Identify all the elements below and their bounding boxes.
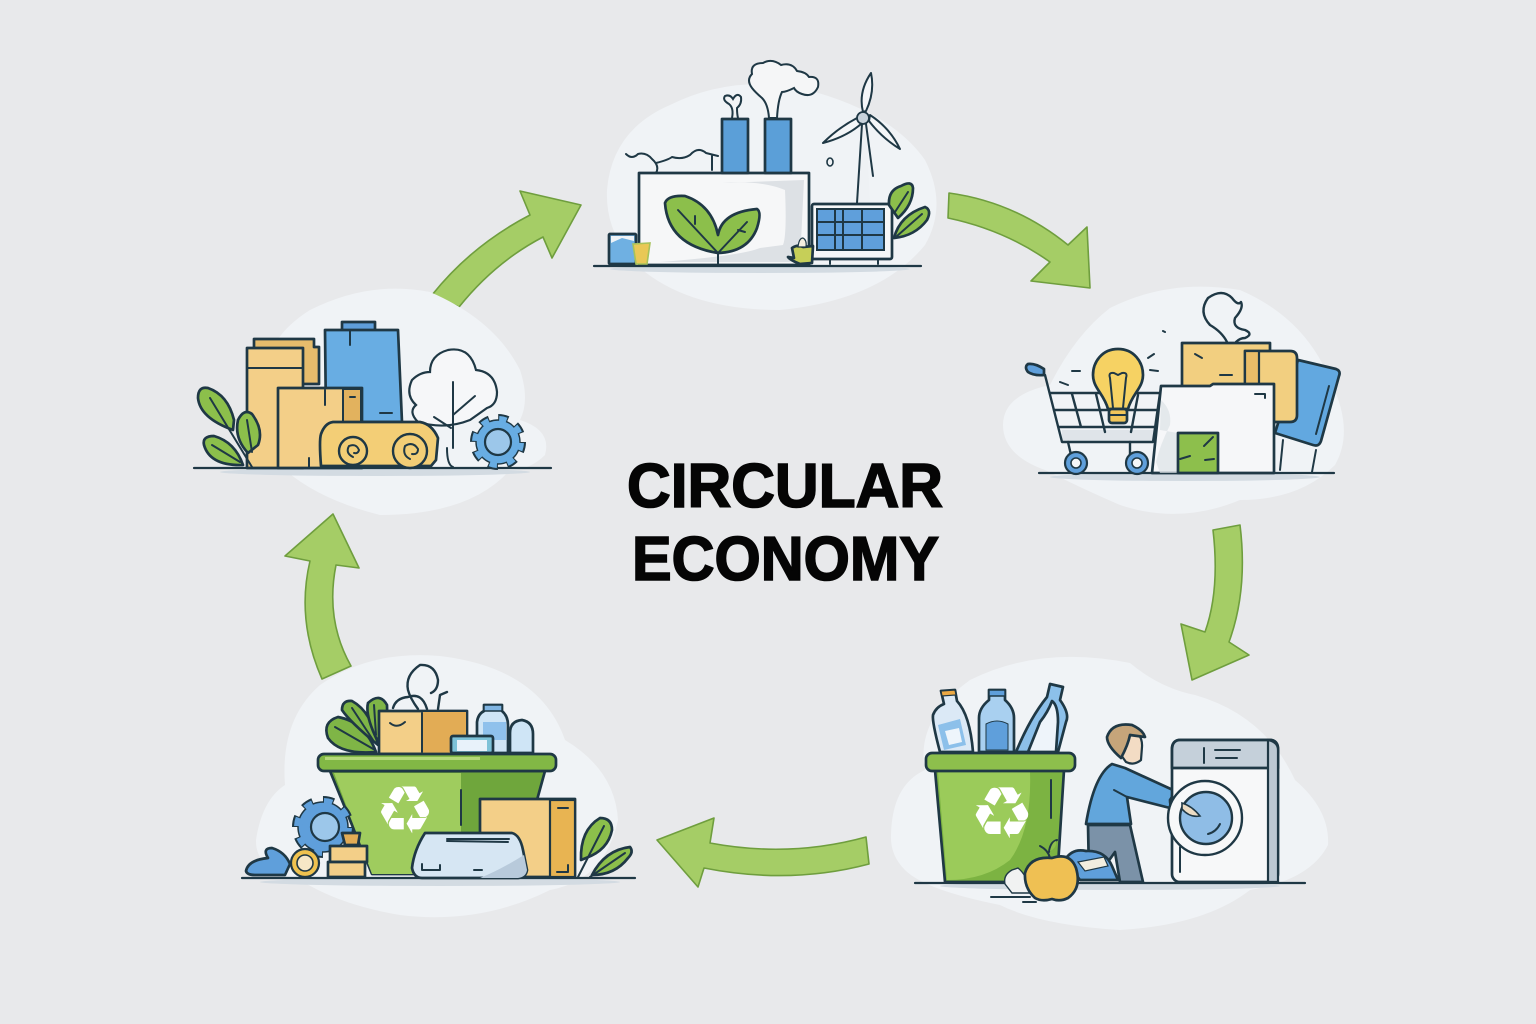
ground line: use: [915, 882, 1305, 890]
title: Circular Economy: ECONOMY: [632, 525, 939, 594]
arrow: recycling to materials: [285, 514, 359, 679]
panel: raw materials with boxes, blue package, tree and gear: [194, 289, 551, 515]
icon: steam: [393, 665, 447, 709]
icon: tree: [409, 349, 497, 467]
icon: clothes pile: [1065, 850, 1118, 880]
icon: recycling bin: [318, 754, 556, 874]
icon: tan boxes: [1182, 343, 1297, 422]
icon: small items: [246, 833, 367, 877]
icon: right leaves: [889, 183, 929, 238]
icon: washing machine: [1168, 740, 1278, 882]
icon: bottles on bin: [451, 705, 533, 753]
background blob: use: [891, 657, 1328, 930]
icon: wind turbine: [823, 73, 900, 203]
icon: pillow package: [412, 833, 527, 878]
arrow: consumption to use: [1181, 525, 1249, 680]
icon: white box with green square: [1152, 384, 1274, 473]
background blob: production: [607, 84, 936, 310]
ground line: consumption: [1039, 473, 1334, 481]
panel: consumption with shopping cart and products: [1003, 287, 1344, 514]
background blob: materials: [261, 289, 546, 515]
icon: recycling bin: [926, 753, 1075, 882]
title: Circular Economy: CIRCULAR: [627, 452, 943, 521]
icon: leaves behind bin: [326, 698, 387, 752]
icon: blue package: [325, 322, 402, 422]
icon: gear: [298, 802, 348, 852]
icon: top box: [379, 711, 467, 754]
icon: recycling bin: ♻: [375, 772, 435, 849]
icon: bottles: [933, 684, 1067, 752]
arrow: materials to production: [432, 191, 581, 307]
icon: recycling bin: ♻: [970, 771, 1034, 855]
icon: cups and small plant: [609, 234, 813, 264]
ground line: recycling: [242, 878, 635, 886]
icon: right leaves: [578, 818, 632, 877]
icon: blue tilted package: [1275, 360, 1340, 472]
icon: smoke: [626, 61, 818, 173]
icon: gear: [476, 420, 520, 464]
title: Circular Economy: [627, 452, 943, 594]
icon: tan stacked boxes: [247, 339, 362, 468]
arrow: production to consumption: [948, 193, 1090, 288]
icon: steam: [1203, 293, 1250, 342]
icon: large tan box: [480, 799, 575, 877]
panel: production with factory, wind turbine and solar panel: [594, 61, 936, 310]
background blob: recycling: [256, 655, 618, 917]
icon: hay roll: [320, 422, 438, 468]
icon: left leaves: [198, 388, 260, 467]
panel: recycling with green bin, boxes and gear: [242, 655, 635, 917]
icon: solar panel: [812, 204, 892, 264]
icon: shopping cart: [1026, 364, 1160, 474]
ground line: production: [594, 265, 921, 273]
ground line: materials: [194, 468, 551, 476]
icon: factory building: [639, 119, 809, 265]
icon: big leaf: [665, 196, 760, 264]
icon: apple and food scraps: [991, 840, 1078, 902]
icon: light bulb: [1060, 331, 1165, 423]
background blob: consumption: [1003, 287, 1344, 514]
panel: use with recycling bin and person at washing machine: [891, 657, 1328, 930]
icon: person: [1086, 724, 1186, 882]
arrow: use to recycling: [657, 818, 869, 887]
